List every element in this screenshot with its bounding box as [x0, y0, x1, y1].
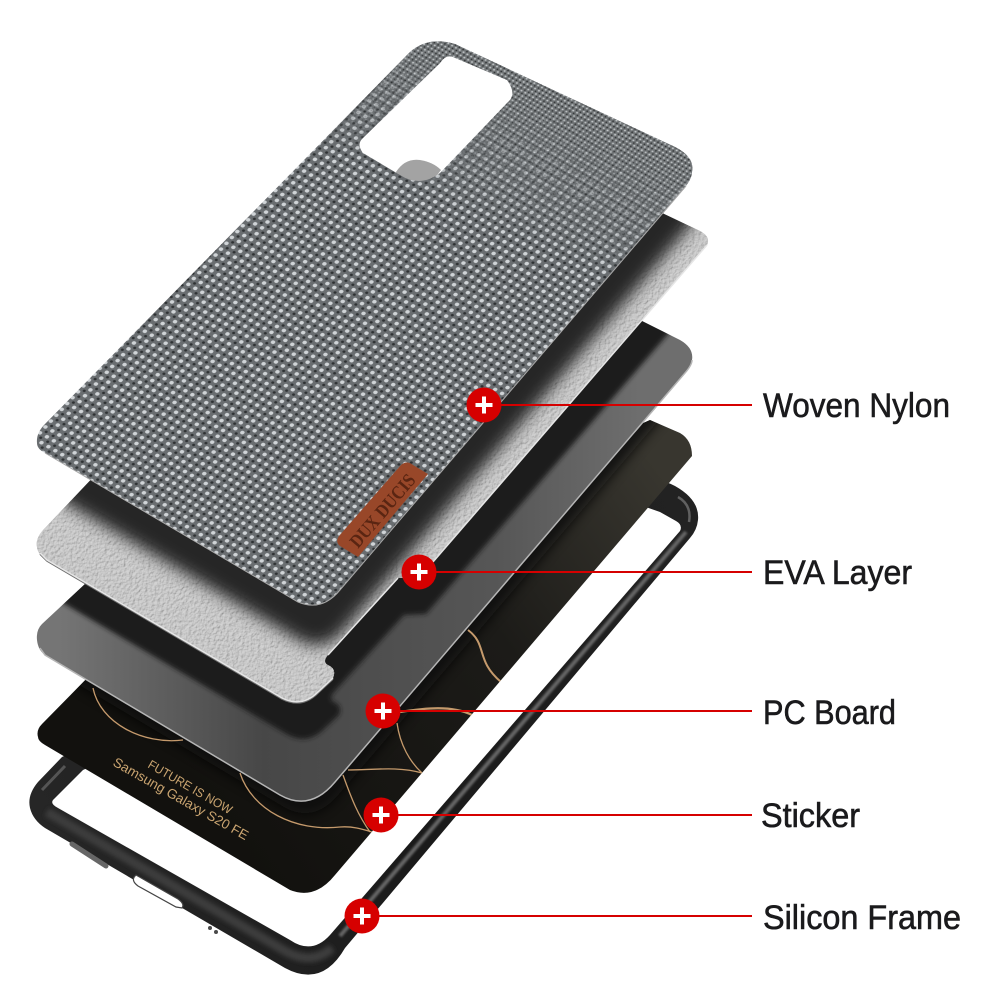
- shadow of EVA layer: [62, 321, 671, 742]
- EVA seen through camera cut-out: [396, 160, 441, 182]
- callout: EVA Layer: [402, 554, 912, 592]
- sticker caption: Samsung Galaxy S20 FE: [111, 755, 251, 843]
- callout: PC Board: [366, 694, 896, 732]
- PC board layer: [36, 321, 693, 802]
- foam texture and nylon shadow: [36, 214, 708, 701]
- callout: Silicon Frame: [344, 898, 961, 937]
- brand patch: DUX DUCIS: [346, 470, 420, 552]
- fine weave at top: [330, 41, 692, 272]
- callout: Silicon Frame: Silicon Frame: [763, 899, 961, 937]
- sticker caption: FUTURE IS NOW: [146, 757, 235, 817]
- callout: Woven Nylon: Woven Nylon: [763, 387, 950, 425]
- callout: PC Board: PC Board: [763, 694, 896, 732]
- volume slot: [72, 844, 106, 866]
- silicon frame layer: [29, 478, 698, 975]
- EVA layer: [36, 214, 708, 704]
- microphone holes: [208, 926, 212, 930]
- callout: EVA Layer: EVA Layer: [763, 554, 912, 592]
- callout: Sticker: [364, 797, 860, 835]
- callout: Sticker: Sticker: [761, 797, 860, 835]
- shadow of PC board on sticker: [76, 420, 662, 814]
- gold line art: [93, 630, 501, 832]
- charging port: [133, 875, 183, 908]
- callout: Woven Nylon: [466, 387, 950, 425]
- sticker layer: [38, 420, 692, 893]
- woven nylon layer: [37, 41, 692, 605]
